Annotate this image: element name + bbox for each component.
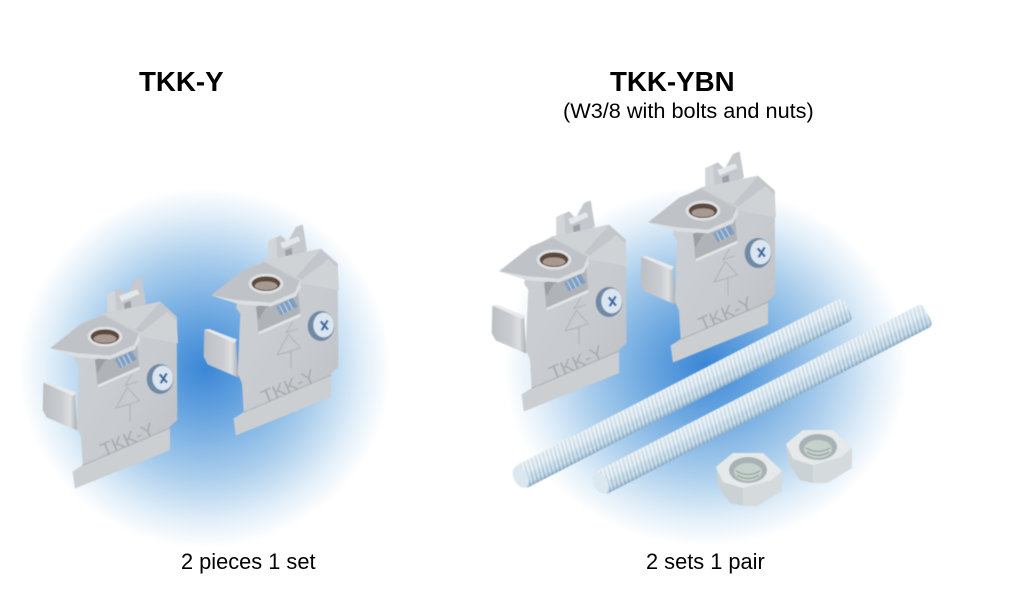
bracket: TKK-Y right [204,224,339,435]
bracket: TKK-YBN right: TKK-Y [695,293,756,336]
background glow: TKK-Y [19,188,391,548]
threaded bolt 2 [589,303,934,497]
hex nut 2 [786,430,852,483]
bracket: TKK-YBN left [492,200,627,411]
hex nut 1 [716,453,782,506]
subtitle: TKK-YBN: (W3/8 with bolts and nuts) [563,98,814,123]
bracket: TKK-YBN right [641,151,776,362]
title: TKK-YBN: TKK-YBN [610,66,735,97]
threaded bolt 1 [509,297,854,491]
title: TKK-Y: TKK-Y [139,66,224,97]
caption: TKK-Y: 2 pieces 1 set [181,549,316,574]
caption: TKK-YBN: 2 sets 1 pair [646,549,765,574]
bracket: TKK-Y right: TKK-Y [258,366,319,409]
background glow: TKK-YBN [504,186,908,546]
bracket: TKK-YBN left: TKK-Y [546,342,607,385]
bracket: TKK-Y left [43,277,178,488]
bracket: TKK-Y left: TKK-Y [97,419,158,462]
